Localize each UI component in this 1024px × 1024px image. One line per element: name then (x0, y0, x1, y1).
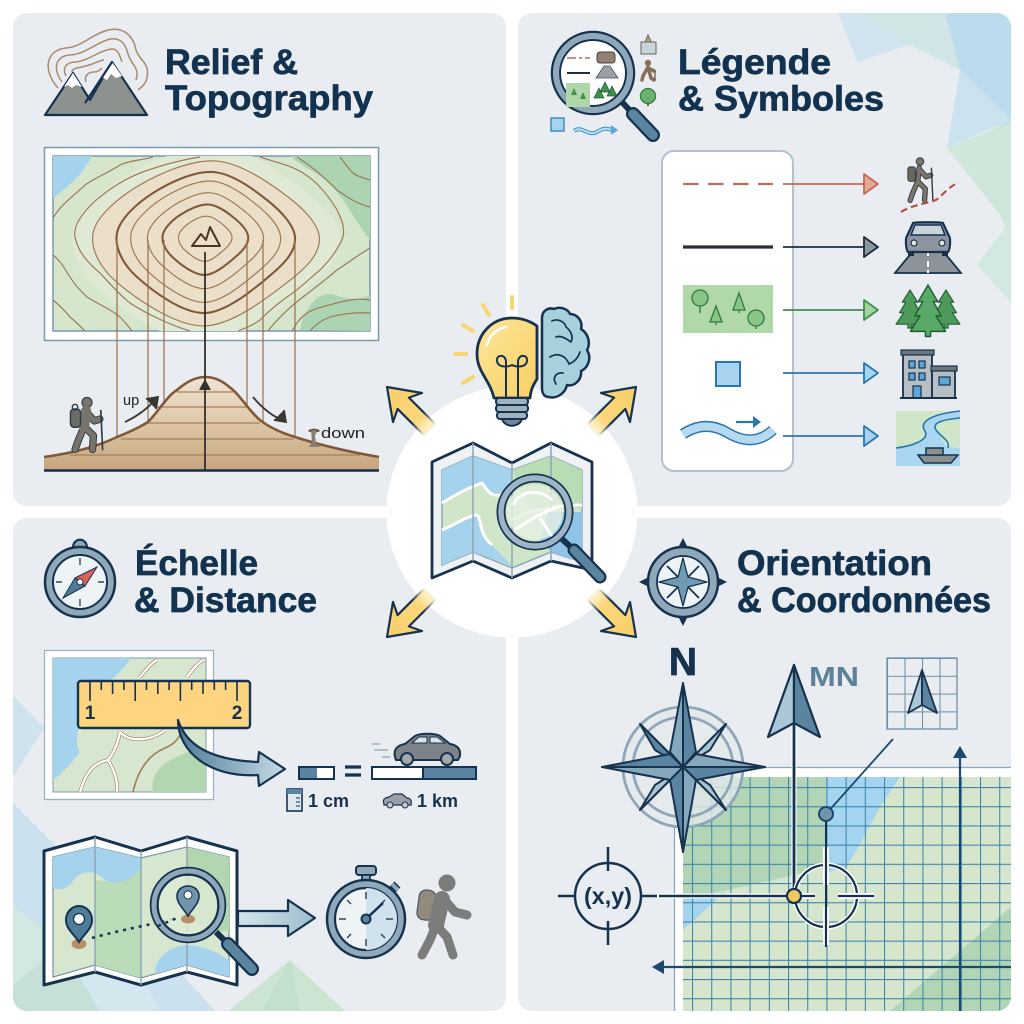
equals sign (345, 767, 361, 775)
leader line with point (819, 739, 893, 947)
label: 1 km: 1 km (417, 791, 458, 811)
arrow: to relief (373, 373, 445, 445)
icon: hiker going up (70, 397, 103, 450)
heading: Légende & Symboles (678, 43, 884, 118)
heading: Légende & Symboles: Légende (678, 43, 831, 82)
icon: mountains with contour lines (45, 29, 148, 115)
heading: Orientation & Coordonnées: Orientation (737, 544, 932, 583)
icon: (x,y) target: (x,y) (584, 883, 632, 909)
panel: relief and topography (13, 13, 506, 506)
icon: ruler (78, 681, 250, 728)
legend box (662, 151, 793, 471)
icon: compass (45, 540, 115, 617)
icon: lightbulb (455, 297, 537, 426)
icon: small car (383, 794, 411, 808)
panel: échelle et distance (13, 518, 506, 1011)
axis arrows (652, 746, 1011, 1011)
icon: summit (192, 227, 220, 246)
arrow: descent (253, 397, 286, 422)
route dotted line (92, 918, 177, 938)
icon: hiker small (642, 60, 655, 80)
arrow: to légende (578, 373, 650, 445)
arrow: building (783, 363, 878, 383)
horizontal line to point (657, 889, 801, 903)
arrow: to orientation (578, 579, 650, 651)
icon: building small (641, 35, 656, 54)
label: N: N (669, 641, 697, 684)
icon: compass rose badge (639, 538, 727, 626)
icon: ruler: 2 (232, 703, 242, 724)
icon: magnifier with pin (154, 871, 252, 969)
heading: Échelle & Distance: Échelle (135, 543, 258, 583)
heading: Relief & Topography (165, 43, 374, 118)
icon: notepad (287, 789, 302, 811)
icon: car (372, 734, 460, 765)
icon: start pin (66, 906, 92, 949)
icon: building (900, 350, 957, 398)
topographic map (44, 146, 378, 343)
arrow: ascent (125, 397, 158, 422)
label: down: down (321, 426, 365, 442)
coordinate grid map (674, 768, 1024, 1024)
arrow: forest (783, 300, 878, 320)
icon: hiker on trail (901, 158, 957, 212)
arrow: trail (783, 174, 878, 194)
icon: compass rose (602, 683, 765, 852)
panel: légende et symboles (518, 13, 1011, 506)
heading: Échelle & Distance (134, 543, 317, 620)
scale bar: 1 cm (299, 767, 334, 779)
icon: stopwatch (327, 866, 405, 958)
icon: (x,y) target (558, 847, 657, 945)
arrow: river (783, 426, 878, 446)
label: 1 cm: 1 cm (308, 791, 349, 811)
icon: brain (542, 308, 589, 397)
folded map with route (44, 837, 237, 985)
legend symbol: building square (716, 362, 740, 386)
heading: Échelle & Distance: & Distance (134, 581, 317, 620)
icon: central folded map with magnifier (432, 443, 600, 578)
label: up: up (123, 393, 139, 409)
icon: tree small (640, 88, 656, 106)
elevation profile (44, 240, 379, 470)
label: MN: MN (809, 661, 859, 692)
legend symbol: river (683, 416, 773, 440)
icon: pine forest (896, 285, 960, 336)
icon: river map with boat (896, 411, 960, 466)
arrow: to échelle (373, 579, 445, 651)
arrow: magnetic north (768, 665, 820, 895)
heading: Relief & Topography: Topography (165, 79, 374, 118)
icon: walking person (416, 874, 467, 955)
legend symbol: forest (683, 285, 773, 333)
arrow: ruler to scale (178, 720, 285, 786)
heading: Orientation & Coordonnées: & Coordonnées (737, 581, 991, 620)
arrow: road (783, 237, 878, 257)
icon: blue square small (551, 118, 564, 131)
heading: Orientation & Coordonnées (737, 544, 991, 620)
icon: river small (574, 125, 618, 135)
arrow: map to time (238, 900, 315, 936)
inset grid with arrow (887, 658, 957, 729)
crosshair target (795, 847, 874, 945)
heading: Légende & Symboles: & Symboles (678, 80, 884, 118)
scale map (44, 650, 214, 800)
scale bar: 1 km (372, 767, 476, 779)
panel: orientation et coordonnées (518, 518, 1024, 1024)
icon: legend magnifier (552, 32, 653, 135)
heading: Relief & Topography: Relief & (165, 43, 298, 82)
legend symbol: trail dashed line (683, 183, 773, 185)
icon: car on road (895, 222, 961, 273)
icon: ruler: 1 (85, 703, 96, 724)
icon: small figure (308, 429, 321, 447)
center circle (386, 386, 638, 638)
legend symbol: road line (683, 245, 773, 249)
